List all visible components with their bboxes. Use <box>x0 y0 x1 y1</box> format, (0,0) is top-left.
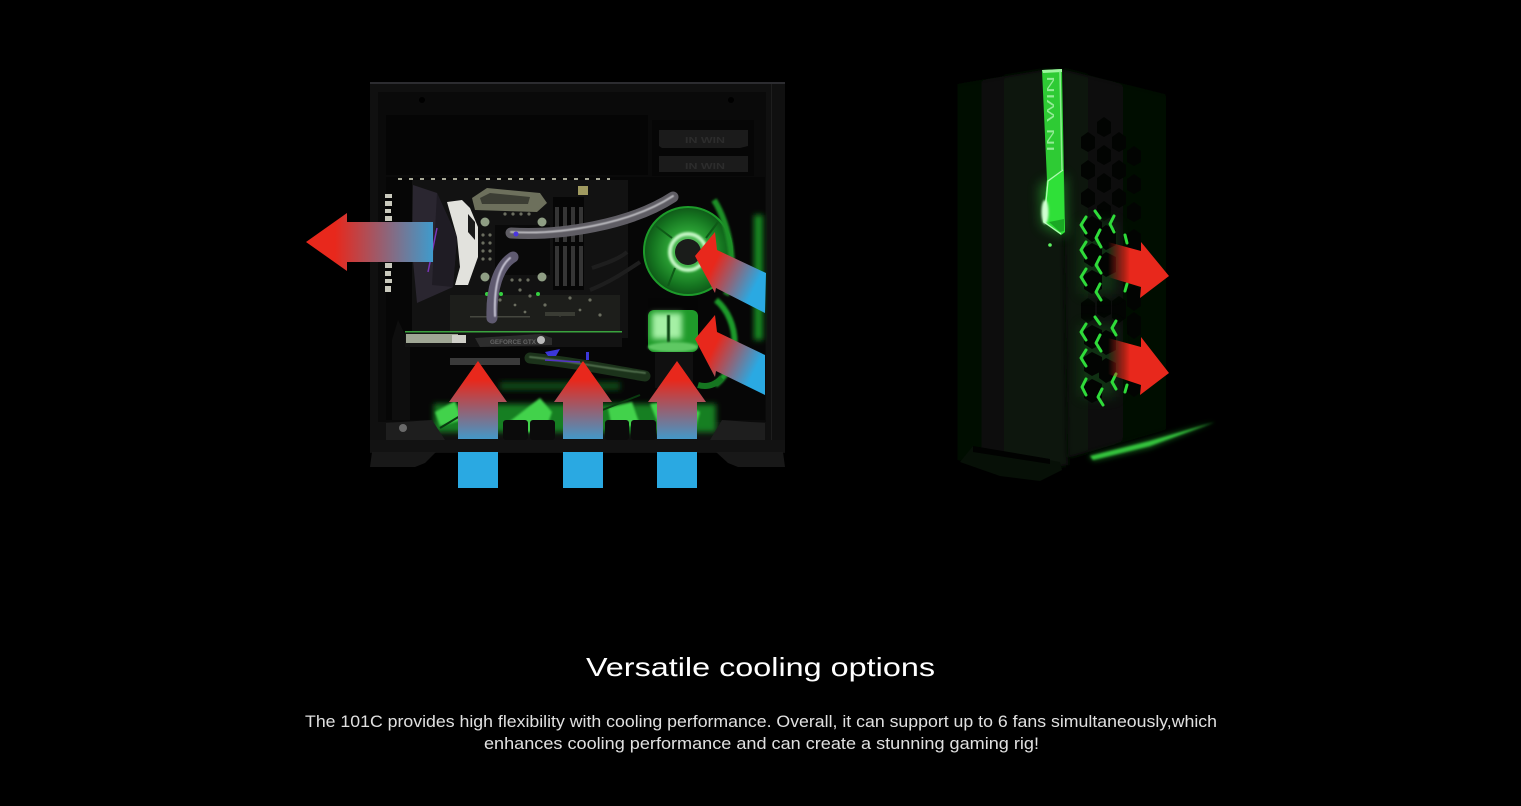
hexagon vents <box>1081 117 1141 397</box>
arrow: side intake lower <box>695 315 765 395</box>
tower side panel <box>1062 69 1200 458</box>
graphics card: GEFORCE GTX <box>490 339 537 346</box>
graphics card <box>405 331 622 365</box>
arrow: bottom intake 2 <box>554 361 612 488</box>
LED strip <box>398 178 610 180</box>
front light bar <box>1042 69 1065 235</box>
vertical green fan edge <box>714 200 732 295</box>
green glow behind vents <box>1080 222 1116 397</box>
lower case rail <box>370 420 785 452</box>
IO ports <box>385 194 392 292</box>
green side glow <box>754 215 763 340</box>
tower front face <box>950 69 1068 470</box>
graphics cooler on rear fan <box>412 185 478 303</box>
body text: enhances cooling performance and can create a stunning gaming rig! <box>484 734 1039 753</box>
lower radiator fan <box>698 300 735 386</box>
power LED <box>1048 243 1052 247</box>
PCI slot brackets <box>392 320 410 420</box>
front light bar: IN WIN <box>1046 76 1057 152</box>
top radiator fan <box>644 207 732 295</box>
drive bays: IN WIN <box>685 162 725 171</box>
lit vent chevrons <box>1081 211 1127 405</box>
RAM sticks <box>553 197 584 290</box>
arrow: exhaust left <box>306 213 433 271</box>
arrow: bottom intake 1 <box>449 361 507 488</box>
panel: open PC case interior view <box>370 82 785 467</box>
motherboard <box>412 180 628 338</box>
arrow: bottom intake 3 <box>648 361 706 488</box>
panel: glowing tower exterior <box>950 69 1215 481</box>
drive bays <box>652 120 754 176</box>
water tubes <box>492 196 673 376</box>
tower base <box>960 446 1062 481</box>
water reservoir <box>648 298 698 388</box>
drive bays: IN WIN <box>685 136 725 145</box>
bottom fans <box>434 382 716 440</box>
interior window <box>386 177 765 420</box>
body text <box>305 712 1217 753</box>
body text: The 101C provides high flexibility with cooling performance. Overall, it can support up to 6 fans simultaneously,which <box>305 712 1217 731</box>
floor light strip <box>1088 422 1215 461</box>
front light bar glow <box>1040 175 1066 236</box>
arrow: tower exhaust upper <box>1108 242 1169 298</box>
dark cells between chevrons <box>1084 216 1116 403</box>
cables beside motherboard <box>590 252 640 290</box>
heading: Versatile cooling options <box>586 652 935 682</box>
arrow: side intake upper <box>695 232 766 313</box>
case frame <box>370 82 785 467</box>
arrow: tower exhaust lower <box>1108 337 1169 395</box>
